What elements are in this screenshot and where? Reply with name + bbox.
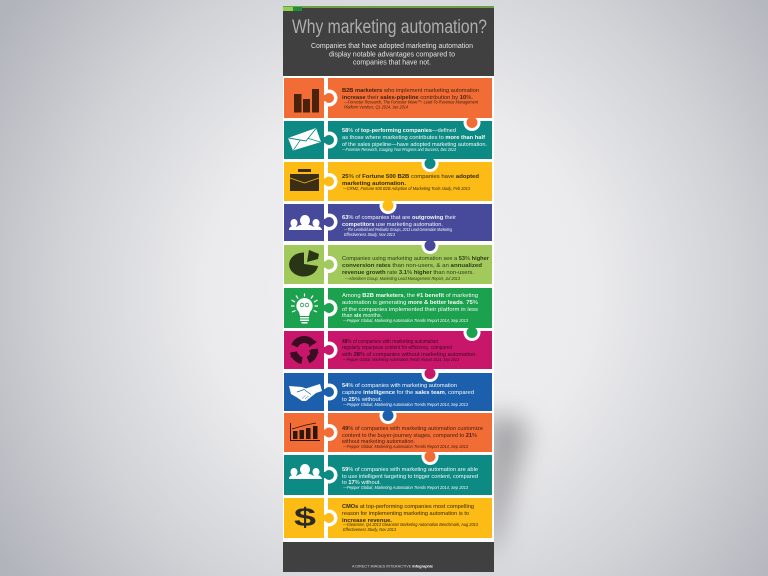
text: #1 benefit: automation is generating more & better leads . 75%: [342, 300, 478, 306]
panel: row 9 orange: [284, 413, 492, 452]
panel: row 5 lime: [284, 245, 492, 284]
text: sales intelligence: [342, 383, 474, 407]
panel: row 10 teal: [284, 455, 492, 495]
text: targeting: to use intelligent targeting to trigger content, compared: [342, 474, 478, 480]
text: #1 benefit: than six months.: [342, 313, 382, 319]
subtitle: companies that have not.: [353, 60, 431, 66]
text: conversion rates: conversion rates than non-users, & an annualized: [342, 263, 483, 269]
text: top performers: [341, 128, 487, 152]
text: #1 benefit: Among B2B marketers , the #1 benefit of marketing: [342, 293, 478, 299]
text: outgrowing: —The Lenskold and Pedowitz Groups, 2013 Lead Generation Marketing: [343, 227, 453, 232]
text: targeting: [342, 467, 478, 490]
panel: row 3 yellow: [284, 162, 492, 201]
icon: bar chart: [294, 89, 319, 112]
text: CMOs: CMOs at top-performing companies most compelling: [342, 504, 474, 510]
text: top performers: 58% of top-performing companies—defined: [342, 128, 456, 134]
text: outgrowing: competitors use marketing automation.: [342, 222, 443, 228]
text: top performers: as those where marketing contributes to more than half: [342, 135, 485, 141]
text: repurpose: [341, 339, 477, 362]
icon: envelope: [288, 128, 321, 150]
text: repurpose: regularly repurpose content for efficiency, compared: [342, 345, 452, 351]
text: repurpose: with 28% of companies without marketing automation.: [341, 352, 477, 358]
icon: dollar sign: $: [294, 502, 317, 532]
text: outgrowing: [342, 215, 456, 237]
poster: [283, 6, 494, 572]
panel: row 2 teal: [284, 121, 492, 159]
icon: cycle arrows: [290, 337, 319, 363]
panel: row 8 blue: [284, 373, 492, 411]
icon: people group: [289, 464, 322, 479]
text: buyer journey: without marketing automation.: [341, 439, 415, 445]
text: top performers: —Forrester Research, Gauging Your Progress and Success, Dec 2013: [341, 147, 457, 152]
text: sales pipeline: —Forrester Research, The Forrester Wave™: Lead-To-Revenue Management: [343, 100, 479, 104]
icon: briefcase: [290, 169, 319, 191]
text: sales intelligence: —Pepper Global, Marketing Automation Trends Report 2014, Sep 2013: [342, 402, 469, 407]
panel: row 4 indigo: [284, 204, 492, 241]
text: sales intelligence: to 25% without.: [342, 397, 382, 403]
text: Fortune 500: —CRM2, Fortune 500 B2B Adoption of Marketing Tools study, Feb 2013: [342, 186, 471, 191]
icon: trend chart: [290, 423, 320, 440]
subtitle: [311, 43, 473, 66]
text: Fortune 500: 25% of Fortune 500 B2B companies have adopted: [342, 174, 480, 180]
text: buyer journey: 49% of companies with marketing automation customize: [342, 426, 483, 432]
icon: lightbulb: [291, 294, 318, 324]
text: buyer journey: content to the buyer-journey stages, compared to 21%: [342, 433, 477, 439]
icon: handshake: [289, 384, 322, 401]
footer: A DIRECT IMAGES INTERACTIVE Infographic: [352, 564, 434, 568]
text: repurpose: —Pepper Global, Marketing Automation Trends Report 2014, Sep 2013: [342, 357, 460, 362]
text: CMOs: —Gleanster, Q4 2013 Gleanster Marketing Automation Benchmark, Aug 2013: [342, 522, 479, 527]
text: CMOs: Effectiveness Study, Nov 2013: [343, 527, 397, 532]
subtitle: Companies that have adopted marketing automation: [311, 43, 473, 50]
text: conversion rates: [342, 256, 490, 281]
text: Fortune 500: marketing automation.: [342, 181, 406, 187]
icon: people: [289, 215, 322, 230]
text: conversion rates: Companies using marketing automation see a 53% higher: [342, 256, 490, 262]
text: Fortune 500: [342, 174, 480, 191]
text: sales intelligence: 54% of companies with marketing automation: [342, 383, 457, 389]
panel: row 1 orange: [284, 78, 492, 118]
footer: [283, 542, 494, 572]
text: sales pipeline: B2B marketers who implement marketing automation: [342, 88, 479, 94]
subtitle: display notable advantages compared to: [329, 52, 455, 58]
text: #1 benefit: of the companies implemented their platform in less: [342, 307, 478, 313]
icon: pie chart: [289, 250, 319, 276]
text: targeting: 59% of companies with marketing automation are able: [342, 467, 478, 473]
puzzle knobs between rows: [380, 117, 480, 465]
text: top performers: of the sales pipeline—have adopted marketing automation.: [342, 142, 487, 148]
text: sales pipeline: Platform Vendors, Q1 2014, Jan 2014: [344, 104, 409, 110]
panel: row 11 yellow: [284, 498, 492, 538]
text: CMOs: reason for implementing marketing automation is to: [342, 511, 469, 517]
text: CMOs: increase revenue.: [342, 518, 392, 524]
text: targeting: —Pepper Global, Marketing Automation Trends Report 2014, Sep 2013: [342, 485, 469, 490]
header panel: [283, 6, 494, 76]
text: #1 benefit: —Pepper Global, Marketing Automation Trends Report 2014, Sep 2013: [342, 318, 469, 323]
text: conversion rates: —Aberdeen Group, Marketing Lead Management Report, Jul 2013: [344, 276, 461, 281]
text: outgrowing: Effectiveness Study, Nov 2013: [344, 232, 396, 237]
text: outgrowing: 63% of companies that are outgrowing their: [342, 215, 456, 221]
panel: row 6 green: [284, 288, 492, 328]
text: #1 benefit: [342, 293, 478, 323]
text: buyer journey: —Pepper Global, Marketing Automation Trends Report 2014, Sep 2013: [342, 444, 469, 449]
text: sales intelligence: capture intelligence for the sales team, compared: [342, 390, 474, 396]
title: Why marketing automation?: [292, 17, 487, 38]
text: CMOs: [342, 504, 479, 532]
text: buyer journey: [341, 426, 483, 449]
panel: row 7 magenta: [284, 331, 492, 369]
text: repurpose: 48% of companies with marketing automation: [342, 339, 438, 345]
text: targeting: to 17% without.: [342, 480, 381, 486]
text: conversion rates: revenue growth rate 3.1% higher than non-users.: [342, 270, 474, 276]
text: sales pipeline: [342, 88, 479, 110]
text: sales pipeline: increase their sales-pipeline contribution by 10%.: [342, 95, 473, 101]
